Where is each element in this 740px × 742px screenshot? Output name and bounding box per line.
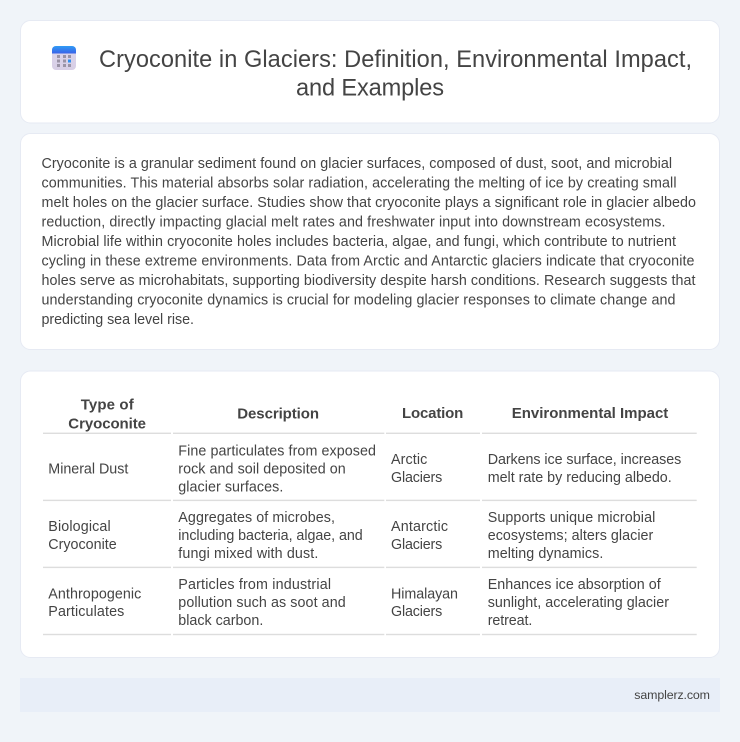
panel: cryoconite table	[20, 371, 720, 658]
table row: mineral dust: rock and soil deposited on	[178, 461, 346, 477]
table row: mineral dust: glacier surfaces.	[178, 479, 283, 495]
table row: biological cryoconite: Antarctic	[391, 519, 448, 535]
table row: anthropogenic particulates: Glaciers	[391, 604, 442, 620]
table row: biological cryoconite: Glaciers	[391, 537, 442, 553]
text block: cryoconite description: communities. This material absorbs solar radiation, accelerating the melting of ice by creating small	[42, 176, 676, 192]
text block: cryoconite description: melt holes on the glacier surface. Studies show that cryoconite plays a significant role in glacier albedo	[42, 195, 696, 211]
table row: anthropogenic particulates: pollution such as soot and	[178, 595, 346, 611]
table row: biological cryoconite: melting dynamics.	[488, 546, 603, 562]
table row: mineral dust: Arctic	[391, 452, 427, 468]
table row: mineral dust: Fine particulates from exposed	[178, 443, 376, 459]
table header row	[43, 396, 697, 434]
table header row: Location	[402, 405, 463, 422]
table row: anthropogenic particulates: retreat.	[488, 613, 532, 629]
table row: biological cryoconite: Cryoconite	[48, 537, 117, 553]
table row: anthropogenic particulates: Particles from industrial	[178, 577, 331, 593]
table row: anthropogenic particulates: black carbon.	[178, 613, 263, 629]
text block: cryoconite description: Cryoconite is a granular sediment found on glacier surfaces, composed of dust, soot, and microbial	[42, 156, 672, 172]
title: and Examples	[296, 76, 444, 102]
table header row: Type of	[81, 396, 135, 413]
panel: title header	[20, 20, 720, 123]
panel: intro paragraph	[20, 134, 720, 350]
table row: anthropogenic particulates: Particulates	[48, 604, 124, 620]
table header row: Description	[237, 405, 319, 422]
table row: biological cryoconite: Biological	[48, 519, 111, 535]
text block: cryoconite description	[42, 156, 696, 328]
table row: mineral dust	[43, 443, 697, 501]
table row: anthropogenic particulates: Enhances ice absorption of	[488, 577, 661, 593]
title: Cryoconite in Glaciers: Definition, Environmental Impact,	[99, 47, 692, 73]
text block: cryoconite description: holes serve as microhabitats, supporting biodiversity despite harsh conditions. Research suggests that	[42, 273, 696, 289]
footer bar	[20, 678, 720, 712]
title	[99, 47, 692, 102]
table row: anthropogenic particulates: sunlight, accelerating glacier	[488, 595, 669, 611]
table row: biological cryoconite	[43, 510, 697, 568]
table row: mineral dust: melt rate by reducing albedo.	[488, 470, 672, 486]
text block: cryoconite description: reduction, directly impacting glacial melt rates and freshwater input into downstream ecosystems.	[42, 214, 666, 230]
table row: mineral dust: Darkens ice surface, increases	[488, 452, 681, 468]
text block: cryoconite description: Microbial life within cryoconite holes includes bacteria, algae, and fungi, which contribute to nutrient	[42, 234, 676, 250]
text block: cryoconite description: cycling in these extreme environments. Data from Arctic and Antarctic glaciers indicate that cryoconite	[42, 254, 695, 270]
table row: biological cryoconite: Aggregates of microbes,	[178, 510, 335, 526]
table row: mineral dust: Mineral Dust	[48, 461, 128, 477]
table row: biological cryoconite: fungi mixed with dust.	[178, 546, 318, 562]
table row: biological cryoconite: Supports unique microbial	[488, 510, 655, 526]
table row: anthropogenic particulates: Himalayan	[391, 586, 458, 602]
footer text: source: samplerz.com	[634, 688, 710, 702]
text block: cryoconite description: understanding cryoconite dynamics is crucial for modeling glacier responses to climate change and	[42, 292, 676, 308]
table row: anthropogenic particulates: Anthropogenic	[48, 586, 141, 602]
table row: mineral dust: Glaciers	[391, 470, 442, 486]
text block: cryoconite description: predicting sea level rise.	[42, 312, 194, 328]
table header row: Cryoconite	[68, 415, 146, 432]
table header row: Environmental Impact	[512, 405, 668, 422]
table row: biological cryoconite: ecosystems; alters glacier	[488, 528, 654, 544]
icon: calendar	[52, 46, 76, 70]
table row: anthropogenic particulates	[43, 577, 697, 635]
table row: biological cryoconite: including bacteria, algae, and	[178, 528, 363, 544]
